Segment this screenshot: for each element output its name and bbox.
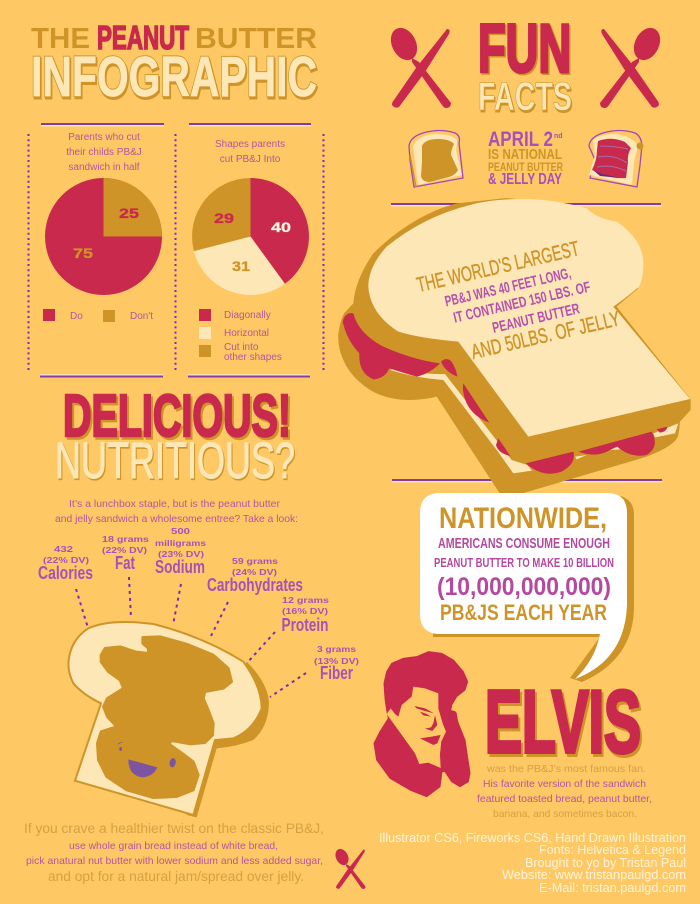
callout: nationwide speech bubble: PEANUT BUTTER TO MAKE 10 BILLION — [434, 555, 614, 570]
icon: left spoon and knife — [386, 23, 451, 108]
legend: shapes — [199, 309, 282, 363]
callout: nationwide speech bubble — [420, 493, 634, 682]
text: world's largest sandwich: PEANUT BUTTER — [491, 300, 581, 337]
heading: delicious nutritious: NUTRITIOUS? — [55, 432, 295, 489]
text: healthier twist: If you crave a healthier twist on the classic PB&J, — [24, 820, 324, 836]
icon: right spoon and knife — [600, 23, 665, 108]
label: carbohydrates: 59 grams — [232, 556, 278, 566]
heading: fun facts — [478, 10, 573, 121]
label: carbohydrates: Carbohydrates — [207, 575, 303, 595]
heading: fun facts: FUN — [478, 10, 571, 87]
illustration: smiling toast — [68, 622, 269, 817]
bubble shadow — [433, 495, 634, 682]
pie chart: shapes: 31 — [232, 258, 250, 274]
heading: fun facts: FUN — [480, 12, 572, 88]
text: world's largest sandwich: THE WORLD'S LARGEST — [415, 237, 582, 297]
pie chart: shapes: 40 — [271, 219, 291, 235]
chart heading: Shapes parents — [215, 139, 285, 150]
toast shadow — [187, 662, 269, 817]
chart heading — [215, 139, 285, 165]
title: PEANUT — [97, 19, 189, 56]
text: world's largest sandwich: IT CONTAINED 150 LBS. OF — [452, 279, 592, 327]
legend: shapes: Horizontal — [224, 328, 269, 339]
label: fiber: 3 grams — [317, 644, 356, 654]
pie chart: do or don't: 75 — [73, 245, 93, 261]
heading: delicious nutritious: DELICIOUS! — [65, 386, 293, 452]
divider lines — [391, 203, 662, 482]
text: healthier twist: use whole grain bread instead of white bread, — [69, 840, 278, 852]
text: elvis description: His favorite version of the sandwich — [483, 778, 646, 790]
legend: do or don't: Do — [70, 311, 83, 322]
callout: nationwide speech bubble: NATIONWIDE, — [439, 502, 607, 535]
pie chart: do or don't: 25 — [119, 205, 139, 221]
callout: april 2nd: APRIL 2 — [488, 128, 553, 151]
callout: april 2nd: nd — [554, 133, 563, 140]
title: INFOGRAPHIC — [32, 47, 318, 111]
hair, body and hand — [374, 652, 470, 797]
text: credits: E-Mail: tristan.paulgd.com — [539, 881, 686, 895]
label: fiber: Fiber — [320, 663, 353, 683]
bubble — [420, 493, 627, 679]
dotted leader lines — [76, 577, 306, 697]
chart heading: Parents who cut — [68, 132, 140, 143]
label: protein: (16% DV) — [282, 606, 328, 616]
label: sodium: milligrams — [155, 538, 206, 548]
legend: shapes: other shapes — [224, 352, 282, 363]
callout: nationwide speech bubble: PB&JS EACH YEAR — [440, 600, 607, 625]
label: carbohydrates — [207, 556, 303, 595]
text: intro: It’s a lunchbox staple, but is the peanut butter — [69, 498, 280, 510]
legend: do or don't — [43, 309, 153, 322]
label: sodium: 500 — [171, 526, 190, 536]
chart heading: sandwich in half — [68, 162, 140, 173]
label: carbohydrates: (24% DV) — [232, 567, 277, 577]
legend: shapes: Diagonally — [224, 310, 271, 321]
label: protein — [282, 595, 329, 635]
callout: april 2nd — [488, 128, 564, 188]
label: fat — [102, 534, 149, 573]
text: intro: and jelly sandwich a wholesome entree? Take a look: — [55, 513, 298, 525]
label: calories: Calories — [38, 563, 93, 583]
panel: shapes pie chart — [188, 123, 324, 378]
legend: shapes: Cut into — [224, 342, 259, 353]
text: credits: Illustrator CS6, Fireworks CS6, Hand Drawn Illustration — [379, 831, 686, 845]
toast slice — [68, 622, 262, 815]
facial features — [414, 706, 441, 745]
label: protein: Protein — [282, 615, 328, 635]
top slice — [368, 199, 690, 437]
heading: delicious nutritious: NUTRITIOUS? — [56, 434, 296, 490]
pie chart: shapes: 29 — [214, 210, 234, 226]
hand — [440, 711, 458, 755]
title — [31, 19, 318, 111]
text: healthier twist: pick anatural nut butter with lower sodium and less added sugar, — [26, 855, 323, 867]
nutrition labels — [38, 526, 359, 683]
label: sodium — [155, 526, 206, 577]
text: credits: Website: www.tristanpaulgd.com — [502, 868, 686, 882]
icon: small spoon and knife — [333, 847, 366, 889]
face and neck — [387, 687, 446, 768]
chart heading: cut PB&J Into — [220, 154, 281, 165]
heading: delicious nutritious: DELICIOUS! — [63, 383, 291, 449]
text: healthier twist — [24, 820, 324, 884]
chart heading: their childs PB&J — [66, 147, 142, 158]
text: elvis description: featured toasted bread, peanut butter, — [477, 793, 652, 805]
title: INFOGRAPHIC — [31, 45, 317, 109]
label: protein: 12 grams — [282, 595, 329, 605]
pie chart: shapes — [192, 178, 309, 295]
text: intro — [55, 498, 298, 525]
title: INFOGRAPHIC — [31, 45, 317, 109]
chart heading — [66, 132, 142, 173]
text: elvis description — [477, 763, 652, 820]
illustration: giant sandwich — [338, 198, 691, 499]
label: calories: (22% DV) — [43, 555, 89, 565]
label: fiber — [314, 644, 359, 683]
text: elvis description: banana, and sometimes bacon. — [493, 808, 637, 820]
heading: fun facts: FACTS — [478, 75, 572, 119]
jelly — [343, 313, 667, 474]
text: healthier twist: and opt for a natural jam/spread over jelly. — [48, 868, 304, 884]
illustration: elvis silhouette — [374, 652, 470, 797]
heading: delicious nutritious — [55, 383, 296, 490]
callout: april 2nd: PEANUT BUTTER — [488, 162, 564, 174]
icon: jelly toast — [589, 130, 644, 187]
text: world's largest sandwich: PB&J WAS 40 FEET LONG, — [443, 265, 573, 310]
label: sodium: Sodium — [155, 557, 205, 577]
legend: do or don't: Don't — [130, 311, 153, 322]
label: calories — [38, 544, 93, 583]
label: calories: 432 — [54, 544, 73, 554]
label: sodium: (23% DV) — [158, 549, 204, 559]
label: fiber: (13% DV) — [314, 656, 359, 666]
text: credits: Fonts: Helvetica & Legend — [539, 843, 686, 857]
text: credits — [379, 831, 686, 895]
icon: peanut butter toast — [409, 130, 463, 187]
title: THE — [31, 23, 90, 55]
pie chart: do or don't — [45, 178, 162, 295]
callout: nationwide speech bubble: AMERICANS CONSUME ENOUGH — [438, 535, 610, 552]
panel: parents who cut pie chart — [28, 123, 176, 378]
text: elvis description: was the PB&J’s most famous fan. — [486, 763, 646, 775]
text: world's largest sandwich — [415, 237, 622, 364]
filling strips — [390, 368, 678, 473]
peanut butter blob — [97, 637, 232, 798]
title: BUTTER — [195, 23, 317, 55]
crust silhouette — [338, 198, 691, 499]
callout: april 2nd: & JELLY DAY — [488, 171, 562, 188]
label: fat: 18 grams — [102, 534, 149, 544]
text: world's largest sandwich: AND 50LBS. OF JELLY — [469, 307, 622, 364]
callout: nationwide speech bubble: (10,000,000,000) — [437, 573, 611, 601]
callout: april 2nd: IS NATIONAL — [488, 147, 562, 163]
toast face — [118, 742, 177, 777]
heading: fun facts: FACTS — [479, 77, 573, 121]
text: credits: Brought to yo by Tristan Paul — [525, 856, 686, 870]
label: fat: Fat — [115, 553, 135, 573]
label: fat: (22% DV) — [102, 545, 147, 555]
